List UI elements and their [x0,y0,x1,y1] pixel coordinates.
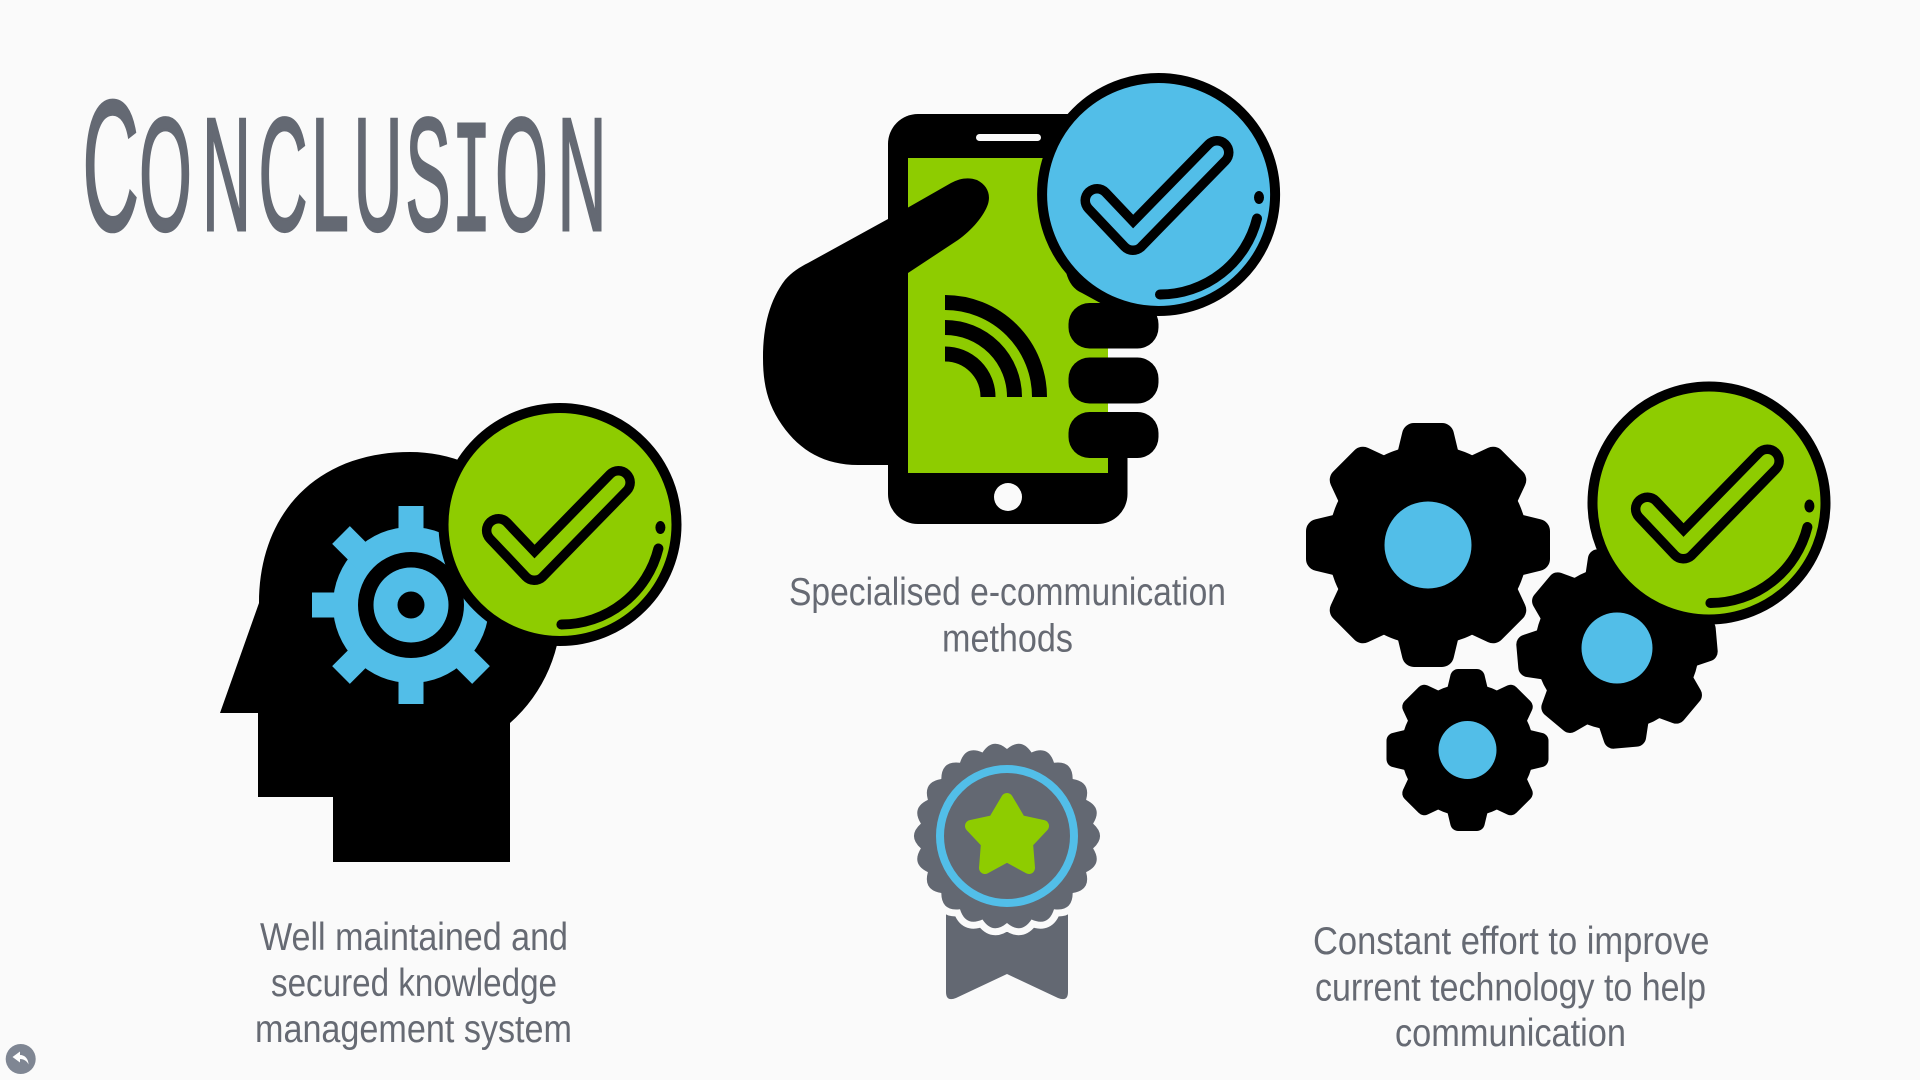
fingers [1066,270,1158,458]
small gear [1394,677,1541,823]
text: constant effort: communication [1395,1012,1626,1055]
text: specialised e-communication: methods [942,618,1073,660]
text: knowledge management [255,916,572,1051]
text: knowledge management: Well maintained and [260,916,568,959]
phone screen [908,158,1108,473]
text: knowledge management: secured knowledge [271,962,557,1005]
green star [971,799,1043,868]
text: constant effort: current technology to help [1315,966,1706,1010]
title: ONCLUS [139,85,451,265]
big gear [1318,435,1538,655]
head silhouette [220,452,561,862]
text: constant effort [1313,920,1710,1055]
phone speaker [976,134,1041,141]
phone body [888,114,1128,524]
medal halo [914,744,1100,928]
scalloped medal disc [914,744,1100,928]
text: knowledge management: management system [255,1008,572,1051]
title: ON [495,85,606,265]
icon: head with gear and check badge [220,408,676,862]
title: I [451,97,492,280]
wifi signal arcs [945,302,1040,397]
icon: award medal with star [914,744,1100,999]
icon: back button [6,1044,36,1074]
check badge: blue [1042,78,1275,311]
blue ring [940,769,1074,903]
icon: three gears with check badge [1318,386,1826,823]
text: specialised e-communication: Specialised e-communication [789,571,1226,614]
title: C [83,63,139,270]
medal ribbon [946,900,1068,999]
medium gear [1519,550,1715,746]
phone home button [994,483,1022,511]
text: constant effort: Constant effort to improve [1313,920,1710,963]
check badge: green [1592,386,1826,620]
blue gear [312,506,510,704]
text: specialised e-communication [789,571,1226,660]
icon: hand holding phone with check badge [763,78,1275,524]
hand and thumb [763,178,989,465]
gap at phone right edge [1108,220,1129,458]
check badge: green [444,408,676,641]
